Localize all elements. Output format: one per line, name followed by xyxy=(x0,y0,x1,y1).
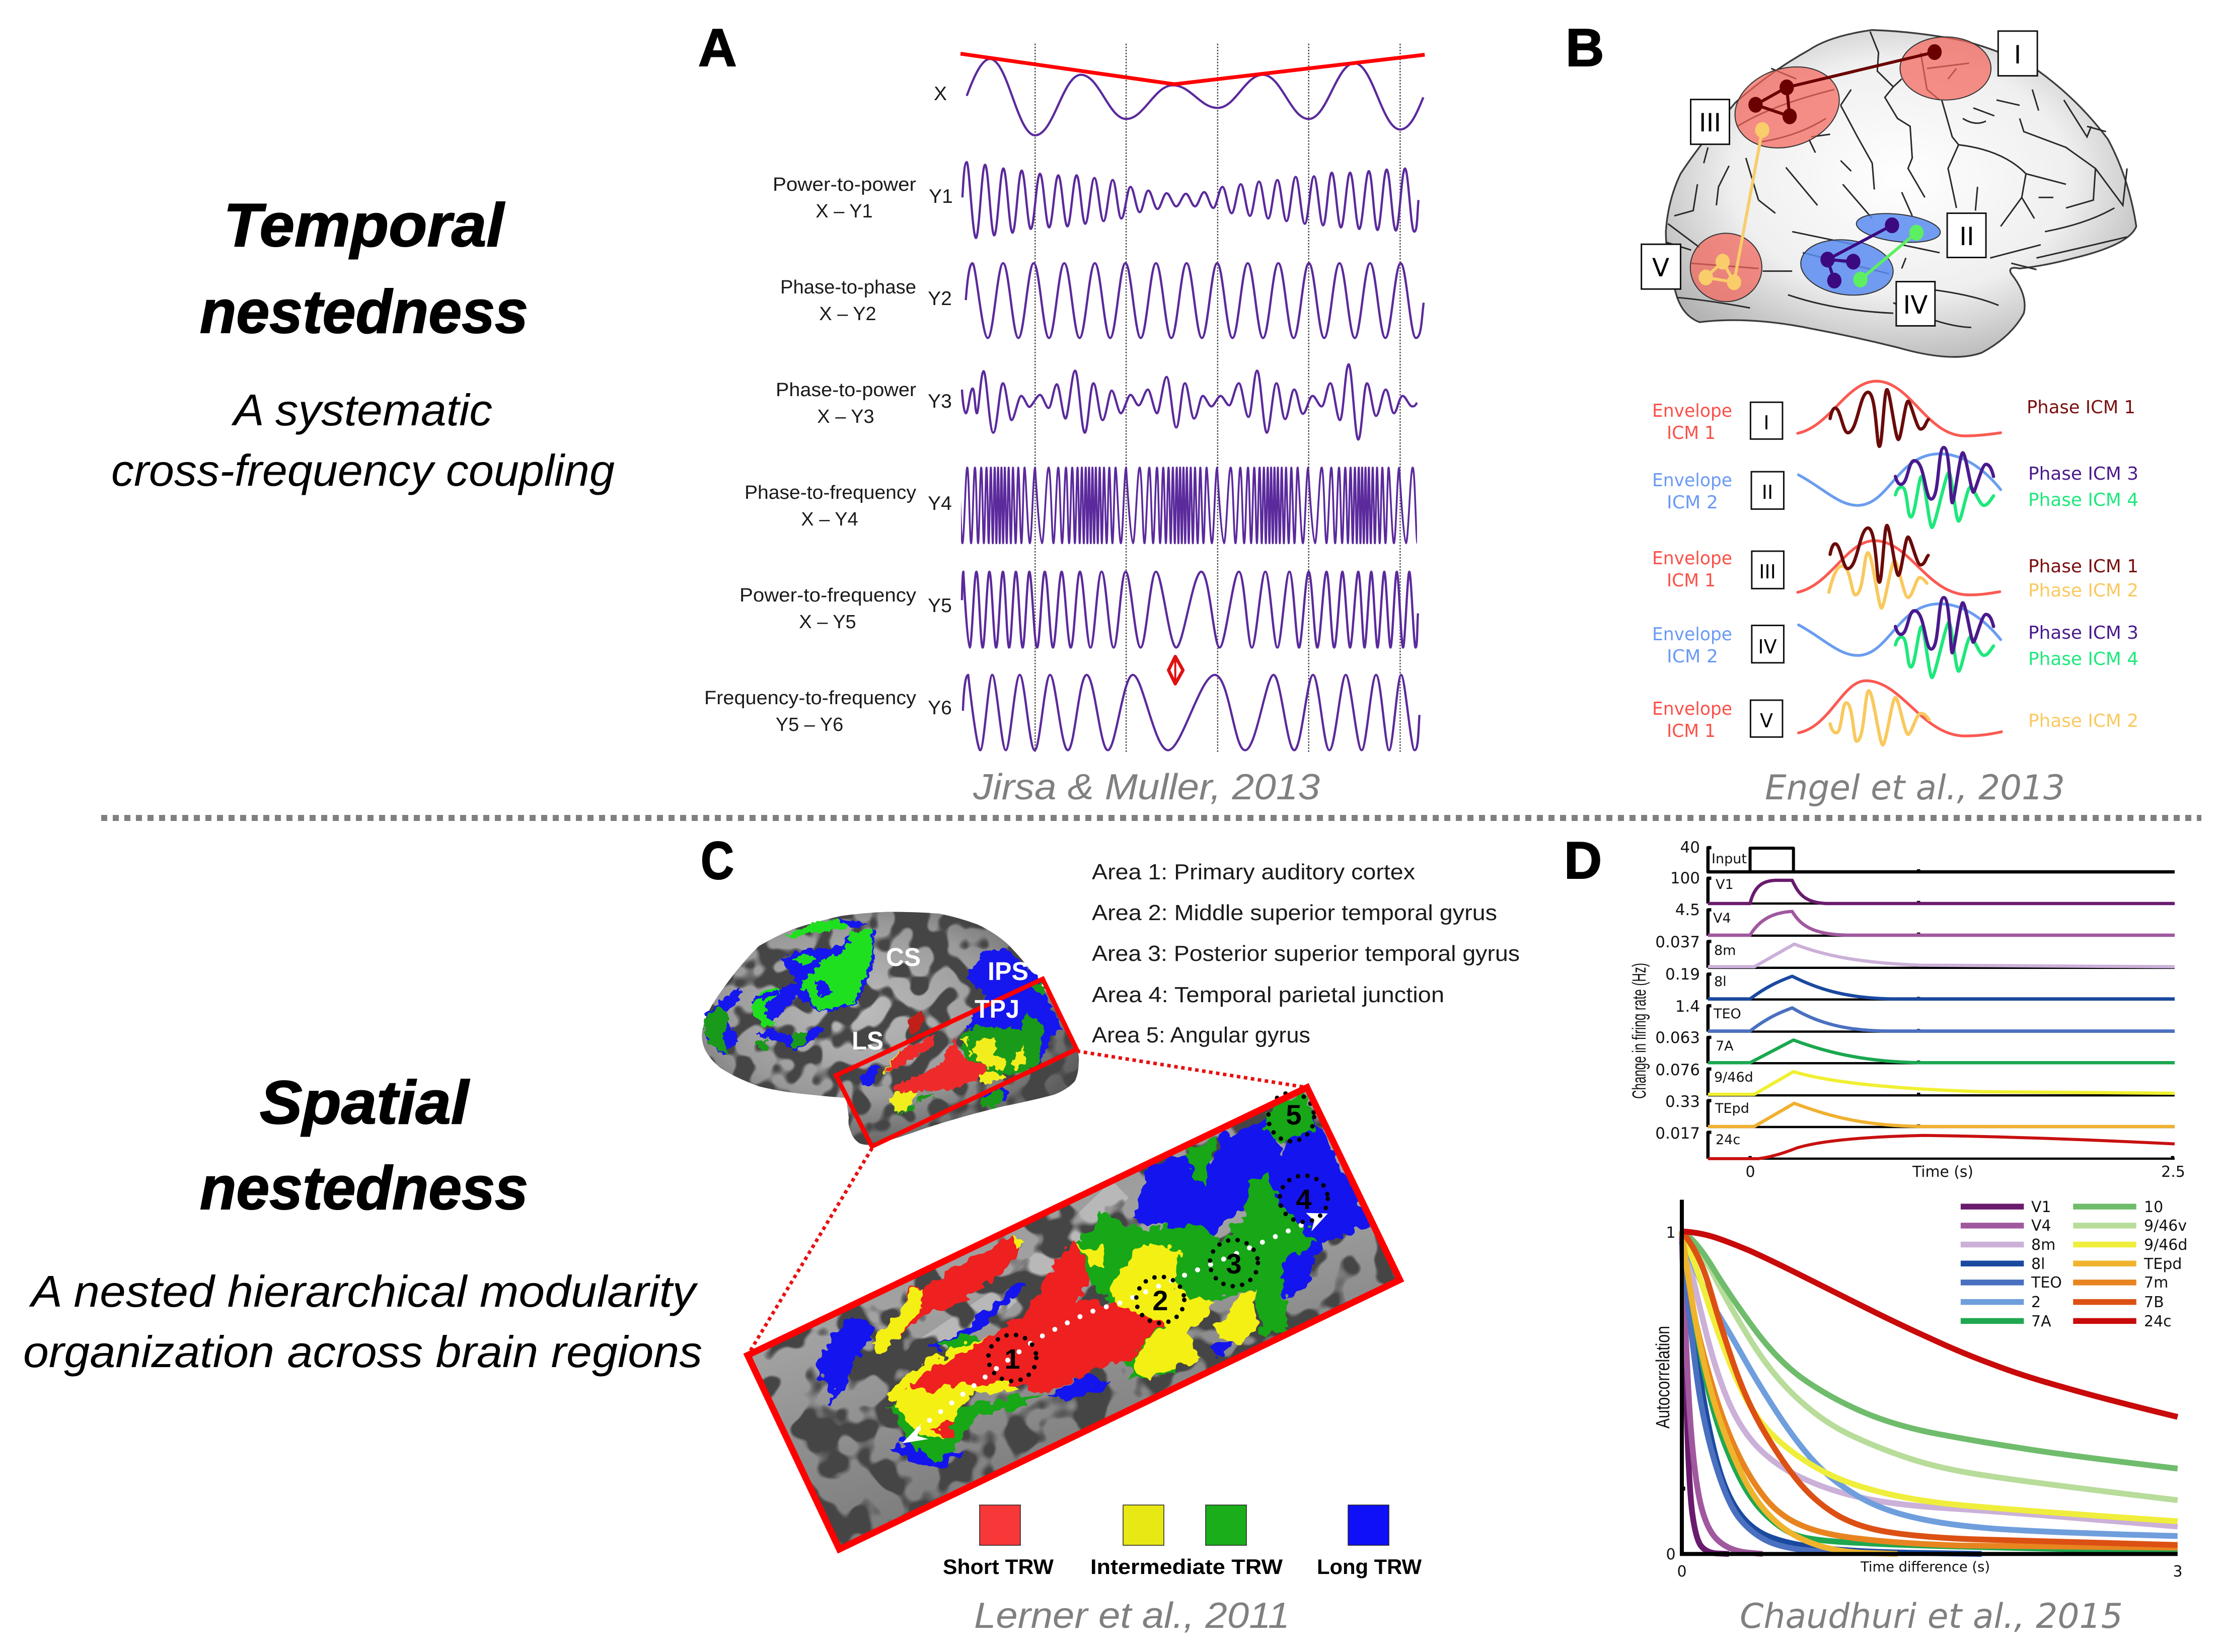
bottom chart axis numbers: 1 xyxy=(1666,1224,1676,1242)
label pair Y5 xyxy=(739,585,916,633)
phase labels: Phase ICM 3 xyxy=(2028,464,2138,484)
label pair Y5: Power-to-frequency xyxy=(739,585,916,606)
legend labels: V1 xyxy=(2031,1198,2051,1216)
label pair Y2: X – Y2 xyxy=(819,304,876,325)
brain outline xyxy=(1666,30,2136,357)
cortex surface xyxy=(702,912,1079,1145)
subtitle line 2: organization across brain regions xyxy=(23,1327,702,1377)
inset clipped content xyxy=(752,1092,1395,1545)
legend labels: 8m xyxy=(2031,1236,2055,1254)
rate scale values: 0.017 xyxy=(1655,1124,1700,1143)
envelope row I xyxy=(1652,401,1732,443)
rate scale values: 4.5 xyxy=(1675,901,1700,919)
intermediate green swatch xyxy=(1206,1505,1246,1545)
phase labels: Phase ICM 1 xyxy=(2028,556,2138,577)
label pair Y6 xyxy=(704,688,916,735)
bottom chart axis numbers: 0 xyxy=(1677,1563,1687,1581)
area row labels: 9/46d xyxy=(1714,1070,1753,1085)
region of interest frame xyxy=(836,979,1077,1147)
inset patches xyxy=(815,1092,1371,1469)
legend labels: Short TRW xyxy=(943,1555,1054,1579)
area row labels xyxy=(1712,851,1753,1148)
firing rate chart xyxy=(1708,848,2175,1159)
area row labels: 7A xyxy=(1716,1038,1734,1054)
envelope row II: Envelope xyxy=(1652,470,1732,491)
trace 8l xyxy=(1708,976,2175,999)
heading: Spatial: Spatial xyxy=(260,1068,470,1137)
envelope labels xyxy=(1652,401,1732,741)
rate scale values: 0.037 xyxy=(1655,933,1700,951)
trace Y1 xyxy=(963,162,1419,238)
region numerals: I xyxy=(2014,40,2021,69)
legend labels: 8l xyxy=(2031,1255,2045,1273)
trace V1 xyxy=(1682,1231,1729,1554)
envelope row II: ICM 2 xyxy=(1667,492,1718,513)
rate scale values: 100 xyxy=(1670,869,1700,887)
legend labels xyxy=(2031,1198,2187,1330)
row V traces xyxy=(1799,681,2002,745)
region V xyxy=(1690,233,1762,302)
row IV traces xyxy=(1799,597,2001,678)
sulcus labels: IPS xyxy=(988,957,1028,986)
row numerals: II xyxy=(1762,481,1773,503)
envelope row III xyxy=(1652,548,1732,591)
yellow network xyxy=(1698,122,1769,290)
x axis title: time difference: Time difference (s) xyxy=(1860,1558,1990,1575)
phase labels: Phase ICM 4 xyxy=(2028,649,2138,669)
functional patches xyxy=(704,918,1062,1115)
phase labels: Phase ICM 1 xyxy=(2027,397,2135,418)
envelope row V xyxy=(1652,699,1732,741)
region label boxes xyxy=(1642,31,2037,326)
envelope row I: ICM 1 xyxy=(1667,423,1716,443)
trace Y6 xyxy=(963,675,1420,750)
region numerals xyxy=(1652,40,2021,320)
area row labels: 24c xyxy=(1716,1132,1740,1148)
rate scale values: 0.19 xyxy=(1665,965,1700,984)
label pair Y1 xyxy=(773,174,916,222)
rate scale values: 0.063 xyxy=(1655,1029,1700,1047)
row numerals xyxy=(1758,412,1777,732)
label pair Y2: Phase-to-phase xyxy=(780,277,916,298)
region numerals: IV xyxy=(1903,290,1928,320)
panel letter D: D xyxy=(1564,832,1602,890)
inflated brain map xyxy=(702,912,1079,1147)
subtitle line 2: cross-frequency coupling xyxy=(111,445,615,495)
envelope row V: Envelope xyxy=(1652,699,1732,719)
legend labels xyxy=(943,1555,1422,1579)
trace 8m xyxy=(1682,1231,2178,1527)
trace 2 xyxy=(1682,1231,2178,1536)
purple network xyxy=(1820,217,1899,288)
top chart axis labels xyxy=(1745,1163,2185,1181)
dashed divider xyxy=(101,815,2201,821)
label pair Y4: Phase-to-frequency xyxy=(745,482,916,503)
enlarged map inset xyxy=(738,1073,1415,1563)
row numerals: IV xyxy=(1758,636,1777,658)
trace 9/46d xyxy=(1708,1072,2175,1094)
area numbers: 2 xyxy=(1152,1285,1168,1316)
trace TEO xyxy=(1708,1008,2175,1031)
envelope row IV xyxy=(1652,624,1732,667)
label pair Y1: X – Y1 xyxy=(816,201,873,222)
area row labels: 8l xyxy=(1714,974,1727,990)
panel letter A: A xyxy=(698,18,737,78)
label pair Y3: X – Y3 xyxy=(817,406,874,427)
legend labels: 7B xyxy=(2144,1294,2164,1311)
trace TEO xyxy=(1682,1242,1834,1553)
legend labels: 9/46v xyxy=(2144,1217,2187,1235)
input pulse xyxy=(1750,848,1794,872)
area numbers: 5 xyxy=(1286,1099,1302,1131)
numbered area markers xyxy=(988,1093,1328,1381)
area numbers: 1 xyxy=(1004,1343,1020,1375)
legend labels: TEpd xyxy=(2143,1255,2182,1273)
area row labels: V1 xyxy=(1716,877,1734,892)
panel B: brain networks and envelope / phase traces xyxy=(1566,18,2138,808)
area row labels: 8m xyxy=(1714,943,1736,958)
dotted zoom connector lines xyxy=(748,1051,1307,1355)
trace names: Y3 xyxy=(928,391,952,412)
label pair Y3: Phase-to-power xyxy=(776,380,916,401)
citation D: Chaudhuri et al., 2015 xyxy=(1740,1597,2123,1636)
panel letter C: C xyxy=(701,831,734,890)
legend labels: Long TRW xyxy=(1317,1555,1422,1579)
coupling type labels xyxy=(704,174,916,735)
top chart axis labels: 2.5 xyxy=(2161,1163,2185,1181)
row I traces xyxy=(1798,381,2001,446)
row numerals: III xyxy=(1759,561,1776,583)
trace Y4 xyxy=(961,467,1417,545)
area list: Area 5: Angular gyrus xyxy=(1092,1023,1310,1047)
trace V1 xyxy=(1708,880,2175,904)
envelope row III: Envelope xyxy=(1652,548,1732,569)
trace names xyxy=(928,83,953,719)
trace Y3 xyxy=(962,364,1417,439)
envelope and phase traces xyxy=(1750,381,2002,745)
panel D: firing rate responses and autocorrelation xyxy=(1564,832,2187,1636)
rate scale values xyxy=(1655,839,1700,1143)
legend labels: 7m xyxy=(2144,1274,2168,1292)
trace 8l xyxy=(1682,1231,1982,1554)
red envelope line xyxy=(960,54,1425,84)
dark red network xyxy=(1748,44,1942,124)
area numbers: 4 xyxy=(1296,1183,1312,1215)
region I xyxy=(1900,37,1991,100)
rate scale values: 0.33 xyxy=(1665,1093,1700,1111)
label pair Y5: X – Y5 xyxy=(799,612,856,633)
top chart axis labels: Time (s) xyxy=(1912,1163,1973,1181)
row II traces xyxy=(1799,447,2001,528)
trace V4 xyxy=(1708,912,2175,935)
area list: Area 3: Posterior superior temporal gyrus xyxy=(1092,941,1520,966)
phase labels: Phase ICM 2 xyxy=(2028,711,2138,731)
bottom chart axis numbers: 3 xyxy=(2173,1563,2183,1581)
envelope row II xyxy=(1652,470,1732,513)
trace Y5 xyxy=(962,572,1418,647)
trace TEpd xyxy=(1682,1231,1897,1554)
trace X xyxy=(967,59,1423,135)
trace 24c xyxy=(1708,1136,2175,1159)
envelope row V: ICM 1 xyxy=(1667,721,1716,741)
citation B: Engel et al., 2013 xyxy=(1765,768,2065,808)
trace 24c xyxy=(1682,1231,2178,1417)
legend labels: Intermediate TRW xyxy=(1090,1555,1283,1579)
sulci xyxy=(1666,32,2127,328)
bottom chart axis numbers: 0 xyxy=(1666,1546,1676,1563)
intermediate yellow swatch xyxy=(1123,1505,1164,1545)
legend labels: 9/46d xyxy=(2144,1236,2187,1254)
citation A: Jirsa & Muller, 2013 xyxy=(973,767,1320,807)
area row labels: Input xyxy=(1712,851,1747,867)
area row labels: V4 xyxy=(1713,911,1731,926)
legend labels: V4 xyxy=(2031,1217,2051,1235)
panel A: cross-frequency coupling waveforms xyxy=(698,18,1490,807)
area numbers: 3 xyxy=(1226,1248,1242,1280)
region II xyxy=(1856,210,1941,246)
row numerals: I xyxy=(1763,412,1769,434)
phase labels xyxy=(2027,397,2138,731)
autocorrelation chart xyxy=(1682,1200,2178,1554)
area row labels: TEpd xyxy=(1715,1101,1749,1116)
vertical dotted time markers xyxy=(1035,44,1400,753)
trace 7B xyxy=(1682,1231,2178,1545)
trace 8m xyxy=(1708,944,2175,967)
row III traces xyxy=(1798,525,2000,608)
red double arrow marker xyxy=(1168,656,1183,684)
sulcus labels: LS xyxy=(852,1026,883,1055)
trace 10 xyxy=(1682,1231,2178,1469)
sulcus labels: CS xyxy=(886,943,921,971)
trace names: Y6 xyxy=(928,697,952,719)
area list: Area 4: Temporal parietal junction xyxy=(1092,983,1444,1007)
trace 7A xyxy=(1682,1231,2178,1552)
phase labels: Phase ICM 3 xyxy=(2028,623,2138,643)
row label boxes xyxy=(1750,402,1784,737)
envelope row IV: ICM 2 xyxy=(1667,646,1718,667)
top chart axis labels: 0 xyxy=(1745,1163,1755,1181)
legend labels: TEO xyxy=(2031,1274,2062,1292)
region IV xyxy=(1799,235,1895,300)
label pair Y4: X – Y4 xyxy=(801,509,858,530)
left heading block: spatial nestedness xyxy=(23,1068,702,1377)
area list: Area 1: Primary auditory cortex xyxy=(1092,860,1415,884)
legend labels: 7A xyxy=(2031,1313,2051,1330)
subtitle line 1: A nested hierarchical modularity xyxy=(29,1266,698,1316)
label pair Y6: Frequency-to-frequency xyxy=(704,688,916,709)
label pair Y4 xyxy=(745,482,916,530)
area list xyxy=(1092,860,1520,1047)
trace names: Y5 xyxy=(928,595,952,617)
trace 7A xyxy=(1708,1040,2175,1063)
legend labels: 24c xyxy=(2144,1313,2172,1330)
trace names: Y2 xyxy=(928,288,952,310)
trace names: Y1 xyxy=(929,186,953,207)
inset frame xyxy=(748,1087,1400,1549)
phase labels: Phase ICM 2 xyxy=(2028,580,2138,601)
label pair Y6: Y5 – Y6 xyxy=(776,714,843,735)
green network xyxy=(1854,225,1923,287)
trace names: X xyxy=(934,83,947,105)
axes xyxy=(1682,1200,2178,1554)
heading: nestedness: nestedness xyxy=(200,277,528,346)
trace TEpd xyxy=(1708,1103,2175,1127)
rate scale values: 0.076 xyxy=(1655,1061,1700,1079)
bottom chart axis numbers xyxy=(1666,1224,2183,1581)
legend labels: 2 xyxy=(2031,1294,2041,1311)
trace V4 xyxy=(1682,1231,1763,1554)
panel C: temporal receptive window maps xyxy=(701,831,1520,1636)
envelope row I: Envelope xyxy=(1652,401,1732,421)
rate scale values: 1.4 xyxy=(1675,998,1700,1016)
trace 9/46d xyxy=(1682,1231,2178,1521)
citation C: Lerner et al., 2011 xyxy=(974,1596,1290,1636)
panel letter B: B xyxy=(1566,18,1604,78)
trace 7m xyxy=(1682,1231,2178,1548)
left heading block: temporal nestedness xyxy=(111,191,615,495)
y axis title: autocorrelation: Autocorrelation xyxy=(1653,1326,1674,1429)
legend swatches xyxy=(1961,1207,2136,1321)
area row labels: TEO xyxy=(1713,1006,1741,1022)
y axis title: change in firing rate: Change in firing rate (Hz) xyxy=(1629,963,1650,1099)
area numbers xyxy=(1004,1099,1312,1375)
region numerals: V xyxy=(1652,253,1669,282)
label pair Y3 xyxy=(776,380,916,427)
sulcus labels xyxy=(852,943,1028,1055)
TRW legend xyxy=(943,1505,1422,1579)
axes and row brackets xyxy=(1708,848,2175,1159)
sulcus labels: TPJ xyxy=(975,995,1019,1023)
region numerals: II xyxy=(1959,222,1974,251)
heading: Temporal: Temporal xyxy=(224,191,505,259)
waveform plot xyxy=(960,43,1425,752)
area list: Area 2: Middle superior temporal gyrus xyxy=(1092,900,1497,925)
heading: nestedness: nestedness xyxy=(200,1154,528,1222)
envelope row IV: Envelope xyxy=(1652,624,1732,645)
label pair Y1: Power-to-power xyxy=(773,174,916,195)
label pair Y2 xyxy=(780,277,916,325)
envelope row III: ICM 1 xyxy=(1667,570,1716,591)
inset cortex surface xyxy=(752,1092,1395,1545)
brain illustration xyxy=(1642,30,2136,357)
row numerals: V xyxy=(1760,710,1773,732)
long swatch xyxy=(1348,1505,1389,1545)
region numerals: III xyxy=(1699,108,1721,137)
rate scale values: 40 xyxy=(1680,839,1700,857)
legend labels: 10 xyxy=(2144,1198,2163,1216)
region III xyxy=(1730,57,1844,158)
trace Y2 xyxy=(966,263,1424,338)
trace 9/46v xyxy=(1682,1231,2178,1500)
white dotted path and arrowheads xyxy=(902,1213,1328,1443)
subtitle line 1: A systematic xyxy=(231,385,492,435)
phase labels: Phase ICM 4 xyxy=(2028,490,2138,510)
short swatch xyxy=(980,1505,1020,1545)
trace names: Y4 xyxy=(928,493,952,514)
